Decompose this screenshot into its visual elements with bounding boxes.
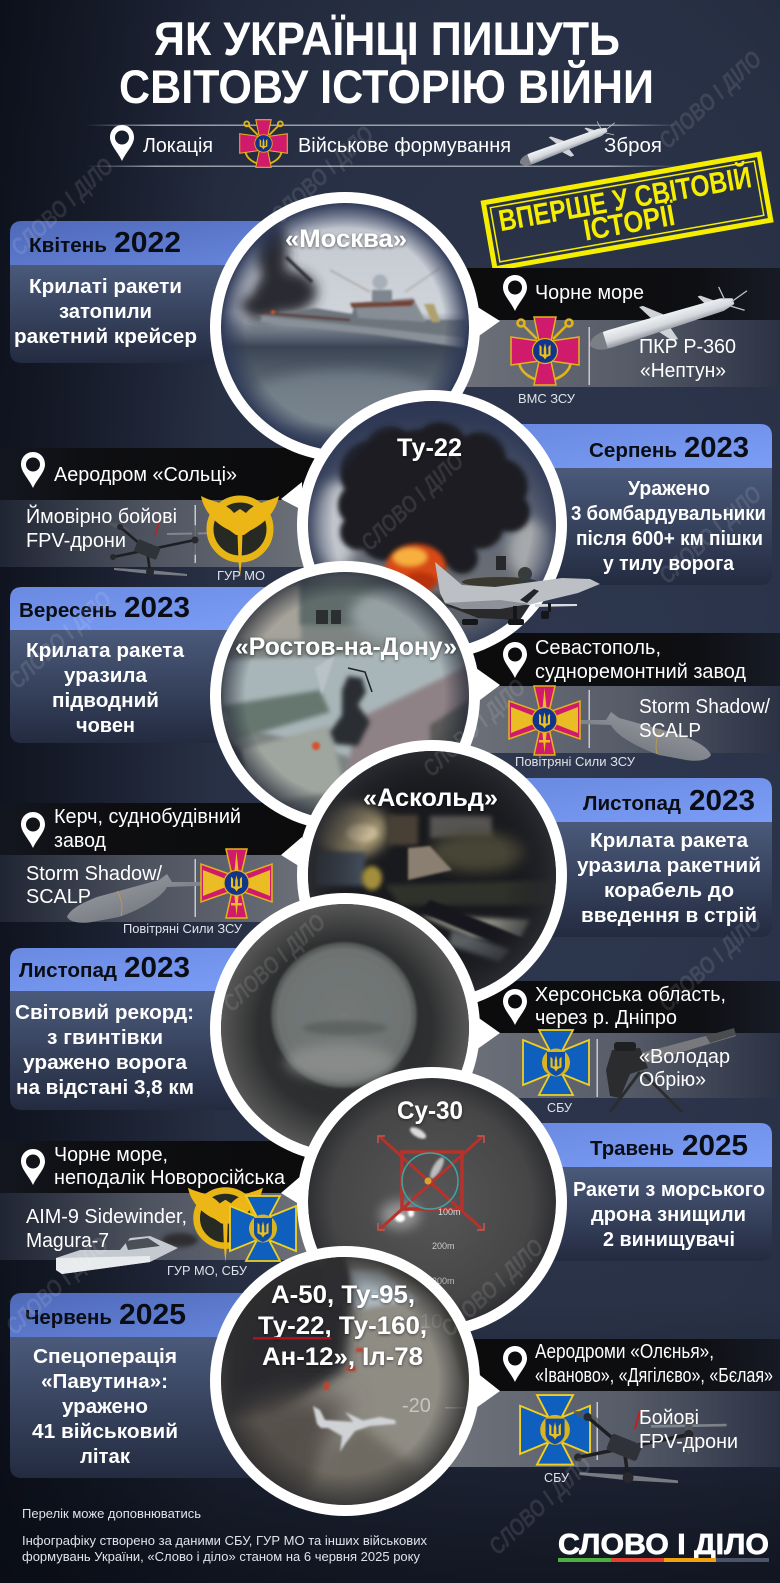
photo circle: Tu-22 bomber xyxy=(281,390,600,660)
title: ЯК УКРАЇНЦІ ПИШУТЬ xyxy=(154,12,620,65)
panel: June 2025: 2025 xyxy=(119,1299,186,1331)
weapon text: ПКР Р-360 xyxy=(639,336,736,358)
bar: sniper details xyxy=(445,981,780,1115)
footnote: sources: формувань України, «Слово і діло» станом на 6 червня 2025 року xyxy=(22,1549,420,1564)
bar: Moskva details xyxy=(445,268,780,406)
location text: Севастополь, xyxy=(535,637,661,659)
panel: August 2023: Серпень xyxy=(589,440,677,462)
emblem: air force xyxy=(509,686,580,755)
photo circle: sniper scope view xyxy=(210,893,500,1163)
bar: Askold details: SCALP xyxy=(26,886,91,908)
legend: location icon xyxy=(110,125,134,161)
weapon text: Ймовірно бойові xyxy=(26,504,177,528)
emblem: SBU xyxy=(523,1030,589,1095)
text: СЛОВО І ДІЛО xyxy=(4,586,117,694)
panel: April 2022: Квітень xyxy=(29,235,107,257)
photo circle: Su-30 targeting view: 200m xyxy=(432,1241,455,1251)
icon: location pin xyxy=(503,989,527,1025)
bar: sniper details: через р. Дніпро xyxy=(535,1007,677,1029)
panel: April 2022: затопили xyxy=(59,301,152,323)
icon: Neptune missile xyxy=(584,275,755,364)
panel: June 2025: літак xyxy=(80,1446,131,1468)
panel: June 2025: Спецоперація xyxy=(33,1346,177,1368)
title xyxy=(119,12,654,113)
panel: November 2023 Askold: Листопад xyxy=(583,793,681,815)
panel: November 2023 Askold: корабель до xyxy=(604,880,734,902)
target crosshair xyxy=(378,1136,484,1230)
panel: November 2023 Askold xyxy=(515,778,772,937)
panel: September 2023: Крилата ракета xyxy=(26,640,185,662)
circle label: aircraft types: Ту-22, Ту-160, xyxy=(258,1312,427,1340)
panel: November 2023 sniper record: на відстані 3,8 км xyxy=(16,1077,194,1099)
panel: June 2025: уражено xyxy=(62,1396,148,1418)
panel: August 2023: 2023 xyxy=(684,432,749,464)
footnote: list may be extended: Перелік може доповнюватись xyxy=(22,1506,201,1521)
icon: location pin xyxy=(503,275,527,311)
panel: August 2023: після 600+ км пішки xyxy=(576,528,763,550)
panel: June 2025 xyxy=(10,1293,265,1478)
icon: location pin xyxy=(503,642,527,678)
panel: September 2023: Вересень xyxy=(19,600,117,622)
emblem: air force xyxy=(201,849,272,918)
icon: location pin xyxy=(21,452,45,488)
panel: June 2025: «Павутина»: xyxy=(41,1371,168,1393)
weapon text: «Володар xyxy=(639,1046,730,1068)
photo circle: Su-30 targeting view xyxy=(281,1067,567,1337)
bar: Su-30 details xyxy=(0,1141,325,1278)
icon: Tu-22 aircraft xyxy=(435,562,600,625)
weapon text: Storm Shadow/ xyxy=(639,696,770,718)
emblem: GUR xyxy=(188,1188,263,1262)
circle label: aircraft types: Ан-12», Іл-78 xyxy=(262,1343,423,1371)
circle label: Ту-22 xyxy=(397,434,462,462)
footnote: sources: Інфографіку створено за даними СБУ, ГУР МО та інших військових xyxy=(22,1533,427,1548)
formation caption: ГУР МО, СБУ xyxy=(167,1263,248,1278)
panel: August 2023: Уражено xyxy=(628,478,710,500)
panel: April 2022: 2022 xyxy=(114,227,181,259)
formation caption: Повітряні Сили ЗСУ xyxy=(515,754,636,769)
icon: location pin xyxy=(503,1346,527,1382)
panel: September 2023 xyxy=(10,587,265,743)
panel: August 2023: у тилу ворога xyxy=(603,553,735,575)
location text: Аеродроми «Олєнья», xyxy=(535,1341,714,1363)
panel: November 2023 sniper record: з гвинтівки xyxy=(47,1027,163,1049)
circle label: «Аскольд» xyxy=(363,784,498,812)
panel: May 2025: 2 винищувачі xyxy=(603,1229,735,1251)
bar: Su-30 details: Magura-7 xyxy=(26,1230,109,1252)
photo circle: Askold ship xyxy=(281,740,567,1010)
photo circle: Su-30 targeting view: 300m xyxy=(432,1276,455,1286)
panel: May 2025: Ракети з морського xyxy=(573,1179,765,1201)
weapon text: Storm Shadow/ xyxy=(26,863,162,885)
emblem: SBU xyxy=(230,1196,296,1261)
bar: Spiderweb details xyxy=(445,1339,780,1485)
circle label: aircraft types: А-50, Ту-95, xyxy=(271,1281,415,1309)
icon: Storm Shadow missile xyxy=(554,712,711,761)
footnote: sources xyxy=(22,1533,427,1564)
text: СЛОВО І ДІЛО xyxy=(356,448,469,556)
panel: April 2022: Крилаті ракети xyxy=(29,276,182,298)
formation caption: СБУ xyxy=(544,1470,570,1485)
panel: November 2023 Askold: уразила ракетний xyxy=(577,855,761,877)
panel: November 2023 sniper record xyxy=(10,948,265,1110)
text: СЛОВО І ДІЛО xyxy=(218,909,331,1017)
logo: Slovo i Dilo: СЛОВО І ДІЛО xyxy=(558,1529,769,1561)
bar: Rostov details: судноремонтний завод xyxy=(535,661,746,683)
panel: November 2023 Askold: 2023 xyxy=(689,785,755,817)
emblem: navy xyxy=(511,317,579,385)
icon: FPV drone xyxy=(109,521,223,576)
emblem: GUR xyxy=(201,496,279,577)
panel: September 2023: човен xyxy=(76,715,135,737)
weapon text: Бойові xyxy=(639,1407,699,1429)
panel: November 2023 sniper record: Листопад xyxy=(19,960,117,982)
text: СЛОВО І ДІЛО xyxy=(484,1452,597,1560)
circle label: Су-30 xyxy=(397,1097,463,1125)
photo circle: Moskva cruiser xyxy=(210,192,500,462)
panel: May 2025 xyxy=(515,1123,772,1261)
panel: June 2025: 41 військовий xyxy=(32,1421,178,1443)
panel: August 2023: 3 бомбардувальники xyxy=(571,503,766,525)
icon: Storm Shadow missile xyxy=(67,874,224,923)
panel: May 2025: 2025 xyxy=(682,1130,748,1162)
location text: Чорне море, xyxy=(54,1144,168,1166)
formation caption: ВМС ЗСУ xyxy=(518,391,576,406)
emblem: SBU xyxy=(520,1395,590,1465)
formation caption: ГУР МО xyxy=(217,568,265,583)
bar: Su-30 details: неподалік Новоросійська xyxy=(54,1167,286,1189)
photo circle: Spiderweb airfield: -20 xyxy=(402,1395,431,1417)
aircraft on apron xyxy=(313,1406,396,1452)
bar: Rostov details xyxy=(445,633,780,769)
circle label: «Ростов-на-Дону» xyxy=(235,633,457,661)
panel: May 2025: дрона знищили xyxy=(591,1204,746,1226)
panel: August 2023 xyxy=(515,424,772,585)
panel: November 2023 sniper record: уражено ворога xyxy=(23,1052,188,1074)
legend: location label: Локація xyxy=(143,135,213,157)
panel: May 2025: Травень xyxy=(590,1138,674,1160)
panel: April 2022: ракетний крейсер xyxy=(14,326,197,348)
panel: November 2023 sniper record: Світовий рекорд: xyxy=(15,1002,194,1024)
formation caption: СБУ xyxy=(547,1100,573,1115)
stamp: first in world history xyxy=(483,154,771,269)
location text: Аеродром «Сольці» xyxy=(54,464,237,486)
photo circle: Spiderweb airfield xyxy=(210,1246,500,1516)
photo circle: Su-30 targeting view: 100m xyxy=(438,1207,461,1217)
bar: Askold details: завод xyxy=(54,830,106,852)
formation caption: Повітряні Сили ЗСУ xyxy=(123,921,243,936)
title: СВІТОВУ ІСТОРІЮ ВІЙНИ xyxy=(119,60,654,113)
panel: September 2023: уразила xyxy=(64,665,148,687)
circle label: «Москва» xyxy=(285,225,407,253)
icon: FPV drone xyxy=(572,1409,727,1483)
photo circle: Rostov-on-Don submarine xyxy=(210,561,500,831)
legend: missile icon xyxy=(515,113,621,175)
legend xyxy=(110,113,662,175)
panel: September 2023: 2023 xyxy=(124,592,190,624)
panel: November 2023 sniper record: 2023 xyxy=(124,952,190,984)
location text: Херсонська область, xyxy=(535,984,726,1006)
icon: location pin xyxy=(21,1149,45,1185)
bar: Spiderweb details: FPV-дрони xyxy=(639,1431,738,1453)
text: СЛОВО І ДІЛО xyxy=(6,153,119,261)
bar: sniper details: Обрію» xyxy=(639,1069,706,1091)
circle label: aircraft types xyxy=(253,1281,427,1371)
bar: Askold details xyxy=(0,803,325,936)
icon: Magura sea drone xyxy=(56,1233,198,1274)
legend: military emblem xyxy=(240,120,287,167)
panel: September 2023: підводний xyxy=(52,690,159,712)
icon: location pin xyxy=(21,812,45,848)
panel: April 2022 xyxy=(10,221,265,363)
bar: Tu-22 details: FPV-дрони xyxy=(26,530,126,552)
stamp: first in world history: ІСТОРІЇ xyxy=(581,199,678,248)
text: СЛОВО І ДІЛО xyxy=(436,1234,549,1342)
bar: Tu-22 details xyxy=(0,448,325,583)
panel: November 2023 Askold: Крилата ракета xyxy=(590,830,749,852)
location text: Керч, суднобудівний xyxy=(54,806,241,828)
photo circle: Spiderweb airfield: 10 xyxy=(420,1311,442,1333)
bar: Moskva details: «Нептун» xyxy=(640,360,726,382)
bar: Rostov details: SCALP xyxy=(639,720,701,742)
weapon text: AIM-9 Sidewinder, xyxy=(26,1206,187,1228)
panel: June 2025: Червень xyxy=(25,1307,112,1329)
text: СЛОВО І ДІЛО xyxy=(418,674,531,782)
text: СЛОВО І ДІЛО xyxy=(266,121,379,229)
icon: sniper rifle xyxy=(606,1028,736,1112)
panel: November 2023 Askold: введення в стрій xyxy=(581,905,757,927)
legend: weapon label: Зброя xyxy=(604,135,662,157)
legend: formation label: Військове формування xyxy=(298,135,511,157)
location text: Чорне море xyxy=(535,282,644,304)
text: СЛОВО І ДІЛО xyxy=(1,1232,114,1340)
